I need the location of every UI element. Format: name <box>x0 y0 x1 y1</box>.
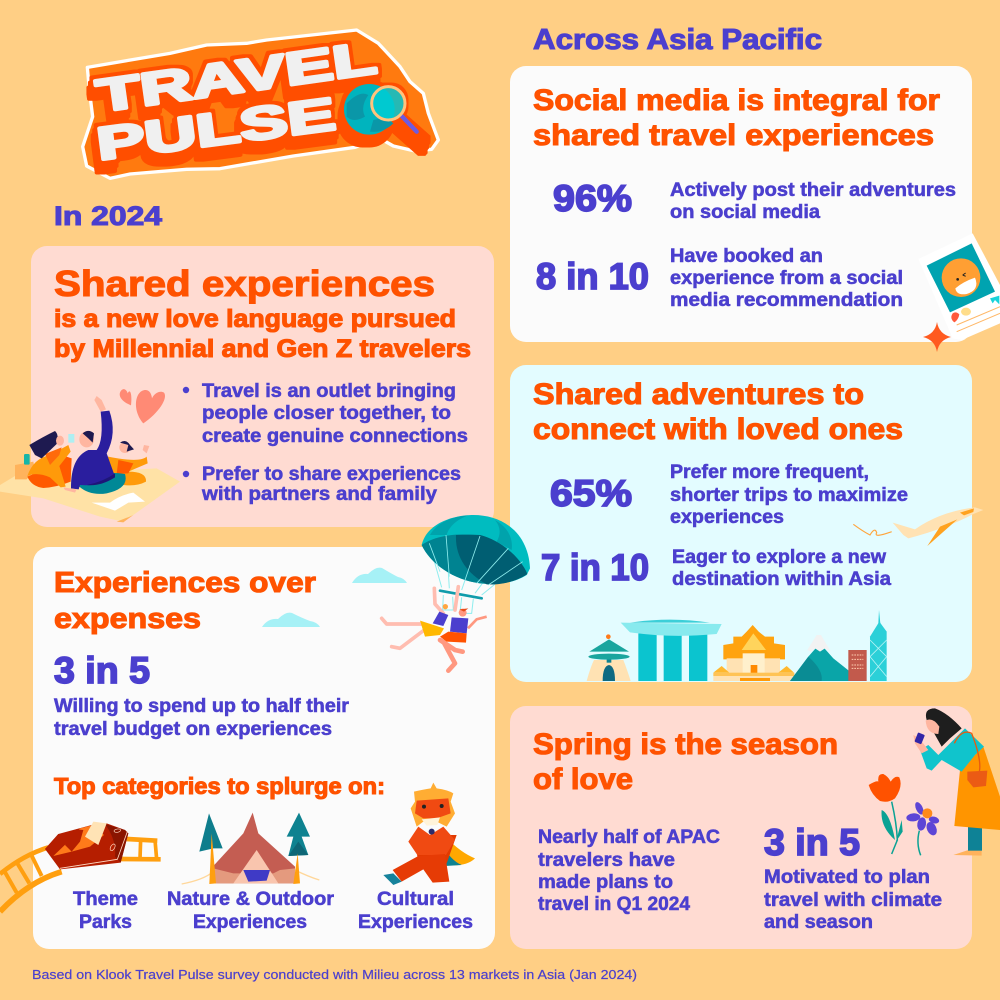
logo: Travel Pulse <box>83 30 438 178</box>
label: theme parks <box>73 889 138 933</box>
logo: Travel Pulse: TRAVEL <box>93 31 380 122</box>
stat: 3 in 5: 3 in 5 <box>54 650 150 691</box>
stat description <box>670 180 956 223</box>
stat description: destination within Asia <box>672 569 891 590</box>
panel subheading: is a new love language pursued <box>54 305 456 333</box>
footnote: Based on Klook Travel Pulse survey conducted with Milieu across 13 markets in Asia (Jan 2024) <box>32 967 637 982</box>
stat description: experiences <box>670 507 784 528</box>
icon: clouds <box>262 568 407 627</box>
illustration: social media photo card <box>918 233 1000 340</box>
stat description: on social media <box>670 202 820 223</box>
illustration: parachute <box>382 515 530 671</box>
stat description <box>670 462 908 528</box>
illustration: airplane <box>853 507 983 546</box>
label: cultural: Cultural <box>377 889 454 910</box>
panel heading <box>533 378 903 446</box>
panel: spring <box>510 706 972 949</box>
logo: Travel Pulse: PULSE <box>94 87 338 170</box>
stat description: travel with climate <box>764 890 942 911</box>
stat description: Willing to spend up to half their <box>54 696 350 717</box>
label: cultural <box>358 889 473 933</box>
text: nearly half: made plans to <box>538 872 673 893</box>
panel heading: Shared adventures to <box>533 378 864 411</box>
heading: In 2024: In 2024 <box>54 201 162 231</box>
stat description <box>670 246 903 311</box>
panel heading <box>533 728 838 796</box>
stat: 7 in 10: 7 in 10 <box>541 547 649 588</box>
panel heading: expenses <box>54 603 201 635</box>
bullet list: with partners and family <box>201 484 437 505</box>
illustration: Asia skyline <box>587 610 887 681</box>
panel heading: Spring is the season <box>533 728 838 761</box>
text: nearly half: travelers have <box>538 850 675 871</box>
label: cultural: Experiences <box>358 912 473 933</box>
stat description: Eager to explore a new <box>672 547 886 568</box>
stat description: Prefer more frequent, <box>670 462 869 483</box>
panel subheading: by Millennial and Gen Z travelers <box>54 335 471 363</box>
panel heading: Shared experiences <box>54 263 435 304</box>
label: nature and outdoor <box>167 889 335 933</box>
heading: Across Asia Pacific: Across Asia Pacific <box>533 24 822 56</box>
stat description: Have booked an <box>670 246 823 267</box>
panel heading: Social media is integral for <box>533 84 940 117</box>
bullet list: Prefer to share experiences <box>202 464 461 485</box>
bullet list <box>183 381 468 505</box>
text: nearly half: Nearly half of APAC <box>538 827 720 848</box>
illustration: woman photographing flowers <box>869 708 1000 856</box>
stat: 3 in 5: 3 in 5 <box>764 822 860 863</box>
stat description <box>764 867 942 933</box>
panel heading: of love <box>533 763 633 796</box>
stat description: experience from a social <box>670 268 903 289</box>
illustration: family picnic <box>0 389 180 522</box>
bullet list: Travel is an outlet bringing <box>202 381 456 402</box>
panel heading: Experiences over <box>54 567 316 599</box>
illustration: tent and trees <box>182 813 319 884</box>
panel heading: connect with loved ones <box>533 413 903 446</box>
stat: 8 in 10: 8 in 10 <box>536 256 649 297</box>
illustration: lion dance character <box>383 783 475 885</box>
stat: 96%: 96% <box>553 178 632 219</box>
subheading: top categories: Top categories to splurge on: <box>54 773 385 799</box>
panel heading <box>54 567 316 635</box>
bullet list: people closer together, to <box>202 403 451 424</box>
panel: shared experiences <box>31 246 494 527</box>
stat description: Actively post their adventures <box>670 180 956 201</box>
stat description: shorter trips to maximize <box>670 485 908 506</box>
stat description: travel budget on experiences <box>54 719 332 740</box>
label: theme parks: Theme <box>73 889 138 910</box>
stat description: media recommendation <box>670 290 903 311</box>
stat: 65%: 65% <box>550 473 632 514</box>
panel: experiences over expenses <box>33 547 495 949</box>
text: nearly half <box>538 827 720 915</box>
text: nearly half: travel in Q1 2024 <box>538 894 690 915</box>
label: nature and outdoor: Experiences <box>193 912 307 933</box>
icon: sparkle star <box>923 322 951 352</box>
panel heading: shared travel experiences <box>533 119 934 152</box>
stat description: Motivated to plan <box>764 867 930 888</box>
panel: shared adventures <box>510 365 972 682</box>
bullet list: create genuine connections <box>202 426 468 447</box>
panel: social media <box>510 66 972 342</box>
stat description: and season <box>764 912 873 933</box>
label: nature and outdoor: Nature & Outdoor <box>167 889 335 910</box>
stat description <box>672 547 891 590</box>
illustration: roller coaster <box>0 822 161 912</box>
label: theme parks: Parks <box>79 912 132 933</box>
panel subheading <box>54 305 471 363</box>
panel heading <box>533 84 940 152</box>
stat description <box>54 696 350 740</box>
